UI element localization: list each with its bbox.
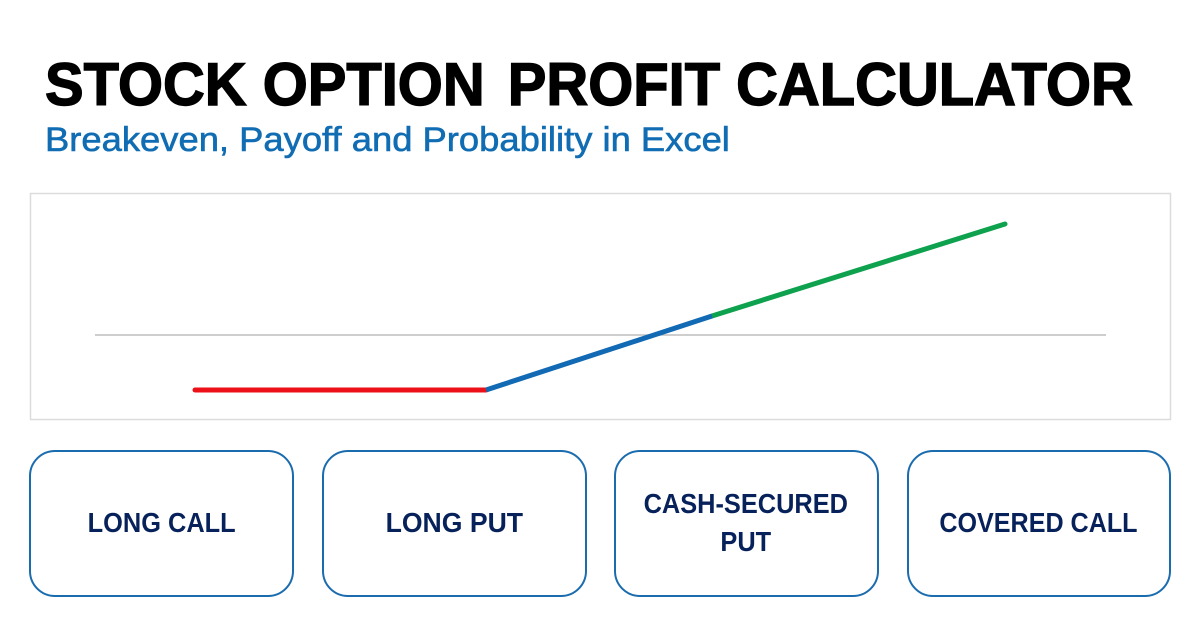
card: covered call: COVERED CALL — [940, 507, 1138, 538]
subtitle: Breakeven, Payoff and Probability in Excel — [45, 121, 730, 159]
card: long put: LONG PUT — [386, 507, 523, 538]
card: long call: LONG CALL — [87, 507, 235, 538]
card: cash-secured put: PUT — [721, 526, 772, 557]
card: covered call — [906, 450, 1171, 596]
card: cash-secured put — [614, 450, 878, 596]
panel: payoff chart — [30, 192, 1172, 420]
title: STOCK OPTION PROFIT CALCULATOR — [45, 51, 1133, 118]
card: long put — [322, 450, 586, 596]
card: long call — [29, 450, 294, 596]
card: cash-secured put: CASH-SECURED — [644, 488, 848, 519]
